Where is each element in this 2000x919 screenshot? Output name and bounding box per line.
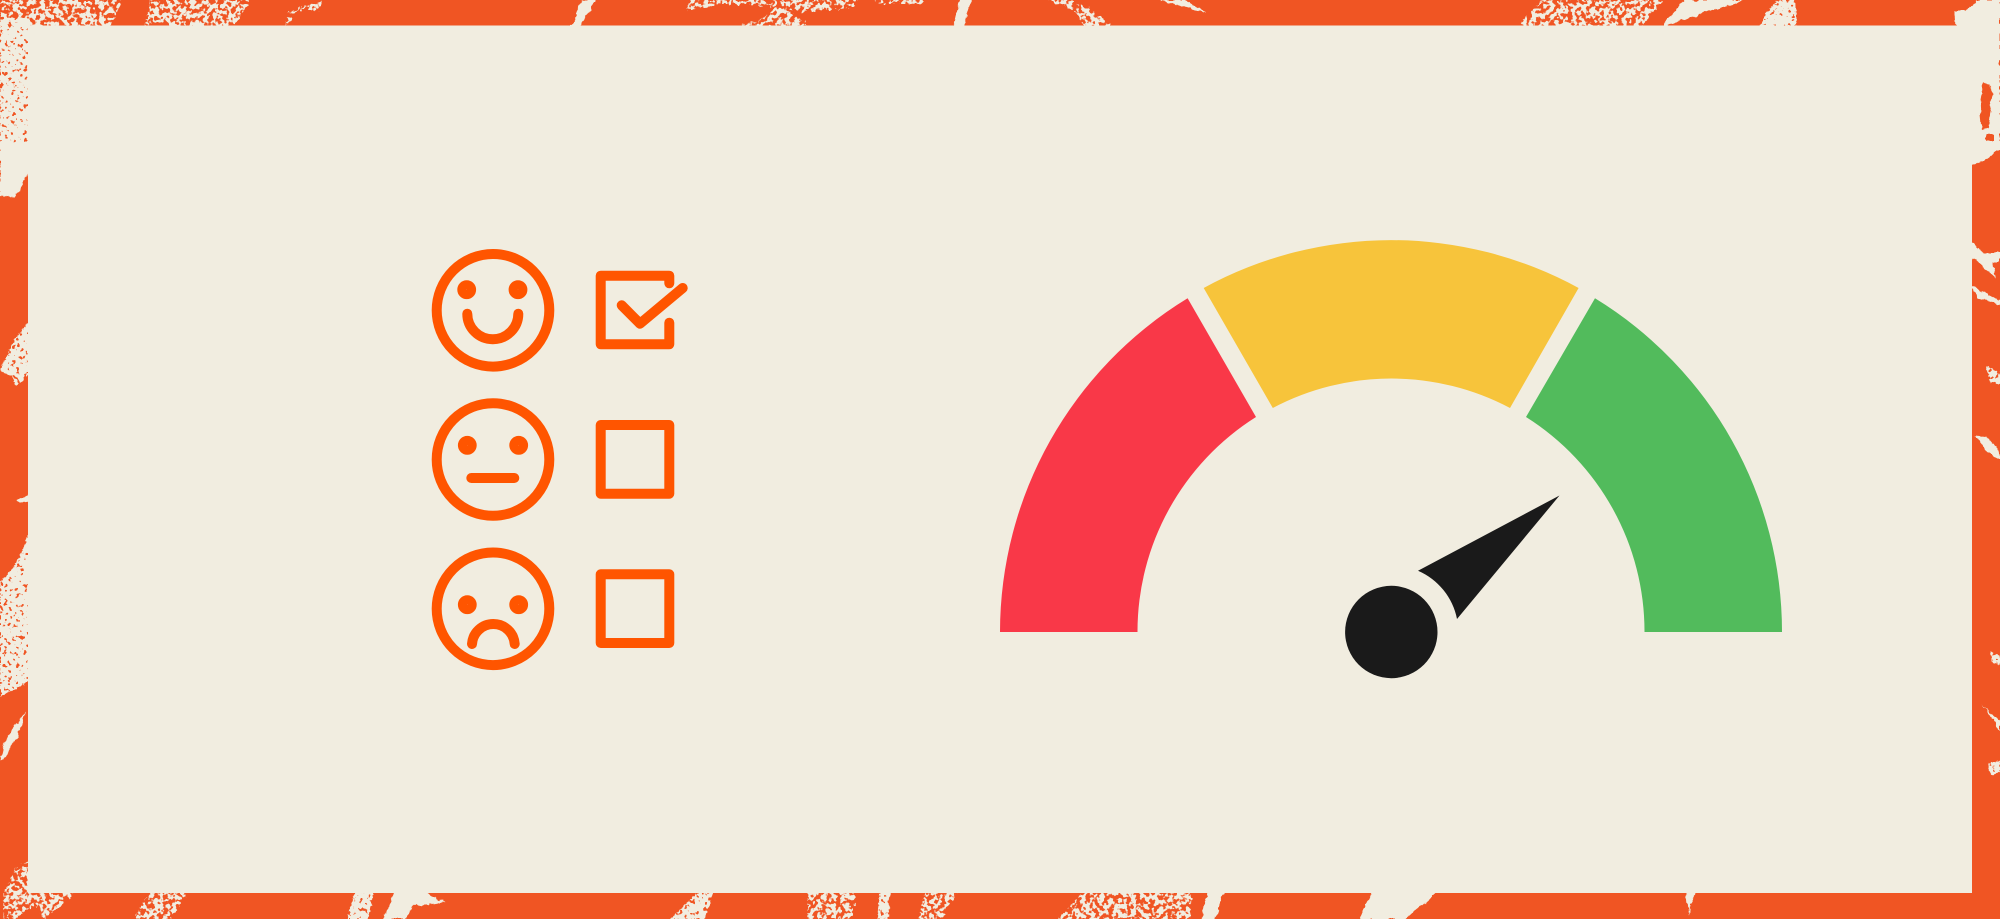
gauge: green segment	[1526, 298, 1782, 632]
gauge: red segment	[1000, 298, 1256, 632]
icon: checked box	[601, 276, 683, 344]
icon: sad face	[437, 552, 549, 665]
gauge: yellow segment	[1204, 240, 1579, 408]
icon: empty box, neutral row	[601, 425, 669, 494]
icon: empty box, sad row	[601, 574, 669, 643]
icon: happy face	[437, 254, 549, 367]
gauge: needle	[1418, 496, 1560, 619]
gauge: hub	[1345, 586, 1438, 678]
icon: neutral face	[437, 403, 549, 516]
